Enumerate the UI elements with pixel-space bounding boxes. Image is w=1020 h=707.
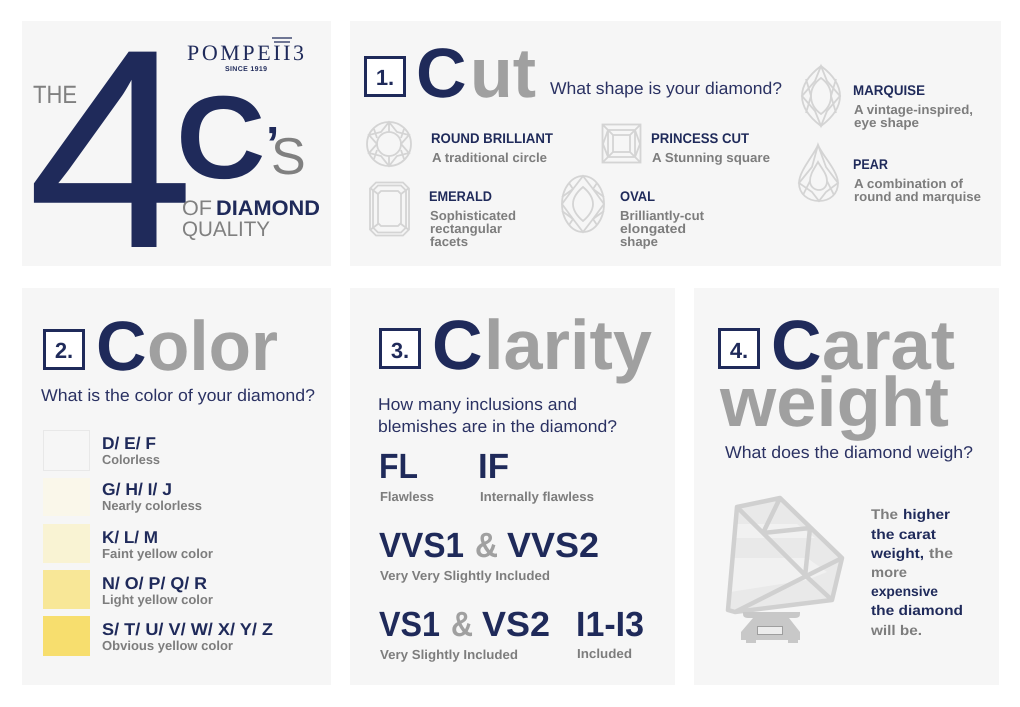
grade: VVS: & <box>475 526 498 565</box>
heading: Color: C <box>96 307 147 385</box>
heading: Clarity: C <box>432 306 483 384</box>
subtitle: quality: QUALITY <box>182 218 270 241</box>
text: higher carat weight: the <box>929 545 953 561</box>
swatch row: K L M <box>43 524 213 563</box>
grade: I1-I3: I1-I3 <box>576 605 644 644</box>
panel: clarity <box>350 288 675 685</box>
icon: oval <box>562 176 604 232</box>
grade: VS: VS1 <box>379 605 440 644</box>
label: princess <box>651 130 770 165</box>
grade: FL <box>379 447 434 504</box>
grade: IF: Internally flawless <box>480 489 594 504</box>
label: marquise: eye shape <box>854 115 919 130</box>
label: pear: PEAR <box>853 156 888 172</box>
label: round brilliant: A traditional circle <box>432 150 547 165</box>
heading: Carat weight: weight <box>719 363 949 441</box>
subtitle: of: OF <box>182 197 212 220</box>
label: round brilliant <box>431 130 553 165</box>
label: marquise: MARQUISE <box>853 82 925 98</box>
panel: carat weight <box>694 288 999 685</box>
grade: VS: Very Slightly Included <box>380 647 518 662</box>
grade: VVS: VVS1 <box>379 526 464 565</box>
label: pear <box>853 156 981 204</box>
swatch row: K L M: Faint yellow color <box>102 546 213 561</box>
swatch row: G H I J: Nearly colorless <box>102 498 202 513</box>
grade: VS: VS2 <box>482 605 550 644</box>
label: pear: A combination of <box>854 176 964 191</box>
label: oval: elongated <box>620 221 686 236</box>
swatch row: N O P Q R <box>43 570 213 609</box>
heading: Cut: ut <box>470 34 536 112</box>
swatch row: K L M: K/ L/ M <box>102 528 158 547</box>
number box 2: 2. <box>55 338 73 363</box>
apostrophe: ’ <box>266 118 279 171</box>
label: THE: THE <box>33 81 77 109</box>
text: higher carat weight: The <box>871 506 898 522</box>
label: pear: round and marquise <box>854 189 981 204</box>
swatch row: D E F: D/ E/ F <box>102 434 156 453</box>
label: oval: shape <box>620 234 658 249</box>
grade: VS <box>379 605 550 662</box>
text: higher carat weight <box>870 506 963 638</box>
heading: Color: olor <box>147 307 278 385</box>
swatch row: N O P Q R: N/ O/ P/ Q/ R <box>102 574 207 593</box>
grade: I1-I3: Included <box>577 646 632 661</box>
swatch row: N O P Q R: Light yellow color <box>102 592 213 607</box>
question <box>378 395 617 436</box>
label: marquise: A vintage-inspired, <box>854 102 973 117</box>
heading: Carat weight: C <box>771 306 822 384</box>
text: higher carat weight: higher <box>903 506 951 522</box>
grade: VVS <box>379 526 599 583</box>
label: emerald: EMERALD <box>429 188 492 204</box>
heading: Carat weight <box>719 306 955 441</box>
question: What is the color of your diamond? <box>41 386 315 405</box>
number box 3: 3. <box>391 338 409 363</box>
panel: cut <box>350 21 1001 266</box>
label: emerald: facets <box>430 234 468 249</box>
icon: diamond on scale <box>728 498 842 643</box>
grade: VVS: Very Very Slightly Included <box>380 568 550 583</box>
panel: color <box>22 288 331 685</box>
swatch row: D E F: Colorless <box>102 452 160 467</box>
text: higher carat weight: weight, <box>870 545 924 561</box>
question: How many inclusions and <box>378 395 577 414</box>
logo: Pompeii3: SINCE 1919 <box>225 66 267 73</box>
icon: marquise <box>802 66 840 126</box>
swatch row: G H I J: G/ H/ I/ J <box>102 480 172 499</box>
panel: title <box>22 0 331 308</box>
label: emerald: Sophisticated <box>430 208 516 223</box>
swatch row: G H I J <box>43 478 202 516</box>
question: blemishes are in the diamond? <box>378 417 617 436</box>
heading: Cut <box>416 34 536 112</box>
question: What does the diamond weigh? <box>725 443 973 462</box>
swatch row: S to Z: S/ T/ U/ V/ W/ X/ Y/ Z <box>102 620 273 639</box>
swatch row: S to Z: Obvious yellow color <box>102 638 233 653</box>
text: higher carat weight: more <box>871 564 907 580</box>
icon: emerald <box>370 182 409 236</box>
grade: FL: FL <box>379 447 418 486</box>
label: oval: Brilliantly-cut <box>620 208 705 223</box>
subtitle: diamond: DIAMOND <box>216 197 320 220</box>
heading: Clarity: larity <box>484 306 652 384</box>
number box 2 <box>44 330 84 368</box>
label: emerald <box>429 188 516 249</box>
grade: FL: Flawless <box>380 489 434 504</box>
icon: pear <box>799 145 838 201</box>
label: emerald: rectangular <box>430 221 502 236</box>
label: princess: PRINCESS CUT <box>651 130 749 146</box>
text: higher carat weight: the diamond <box>871 602 963 618</box>
logo: Pompeii3: POMPEII3 <box>187 40 304 65</box>
heading: Cut: C <box>416 34 467 112</box>
icon: princess <box>602 124 640 162</box>
grade: I1-I3 <box>576 605 644 661</box>
big numeral 4: 4 <box>27 0 194 308</box>
grade: IF: IF <box>478 447 509 486</box>
icon: round <box>367 122 411 166</box>
big letter C: C <box>176 72 265 204</box>
grade: VS: & <box>451 605 473 644</box>
text: higher carat weight: the carat <box>871 526 936 542</box>
grade: VVS: VVS2 <box>507 526 599 565</box>
grade: IF <box>478 447 594 504</box>
label: oval: OVAL <box>620 188 655 204</box>
label: oval <box>620 188 705 249</box>
label: marquise <box>853 82 973 130</box>
number box 1: 1. <box>376 65 394 90</box>
letter s: S <box>271 128 306 186</box>
swatch row: D E F <box>44 430 160 470</box>
text: higher carat weight: expensive <box>871 583 938 599</box>
question: What shape is your diamond? <box>550 79 782 98</box>
swatch row: S to Z <box>43 616 273 656</box>
number box 4: 4. <box>730 338 748 363</box>
number box 3 <box>380 330 420 368</box>
text: higher carat weight: will be. <box>870 622 922 638</box>
heading: Carat weight: arat <box>822 306 955 384</box>
label: round brilliant: ROUND BRILLIANT <box>431 130 553 146</box>
label: princess: A Stunning square <box>652 150 770 165</box>
number box 1 <box>366 58 404 96</box>
number box 4 <box>720 330 758 368</box>
